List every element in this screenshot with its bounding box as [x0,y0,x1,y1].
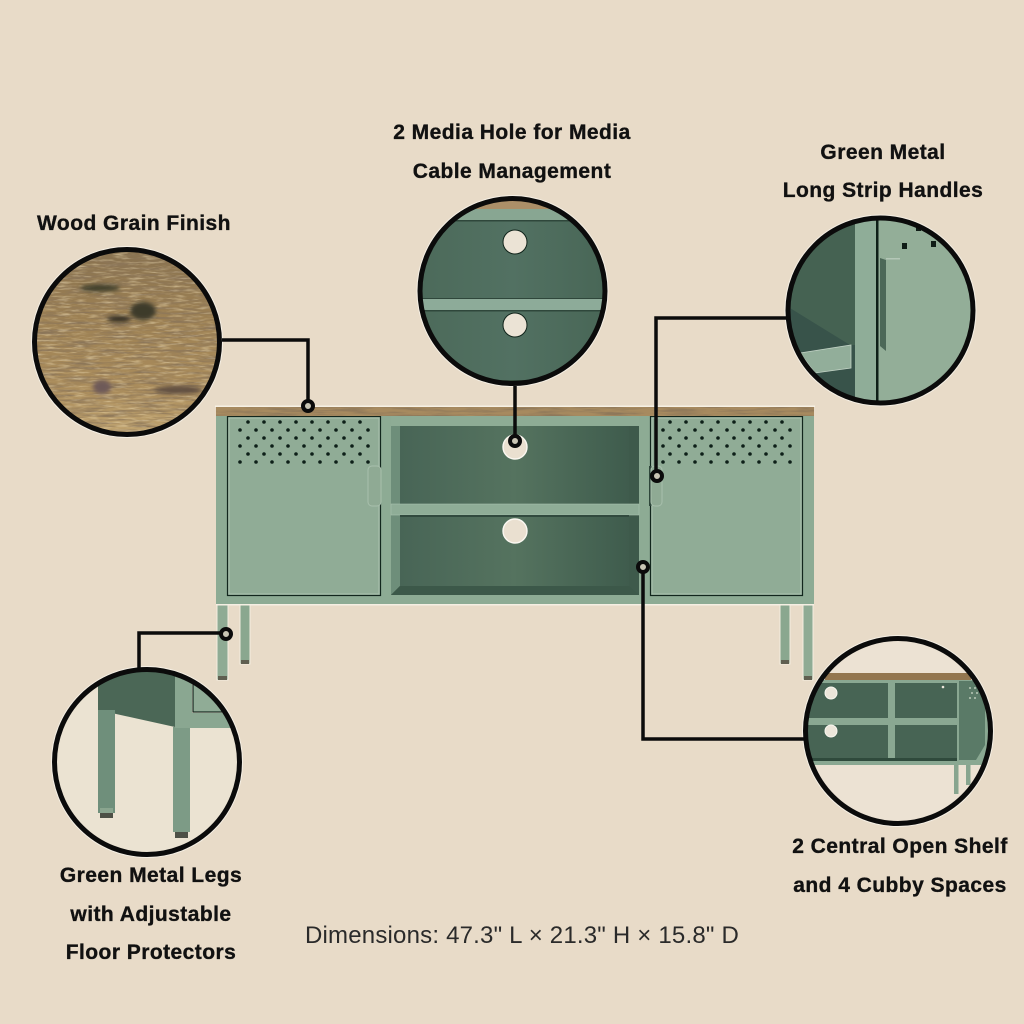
label: legs: Floor Protectors [66,941,236,964]
connector: wood grain [222,340,313,411]
wood top [215,406,815,416]
cabinet legs [217,604,813,680]
label: handles: Long Strip Handles [783,179,983,202]
panel: central open shelf [802,635,994,827]
connector: handles [652,318,787,481]
connector: open shelf [638,562,805,739]
label: wood grain finish: Wood Grain Finish [37,212,231,235]
TV cabinet [215,406,815,680]
label: open shelf: 2 Central Open Shelf [792,835,1008,858]
label: open shelf: and 4 Cubby Spaces [793,874,1007,897]
label: legs [60,864,242,964]
central open compartment [391,416,639,595]
label: handles [783,141,983,202]
panel: long strip handles [784,214,976,407]
panel: wood grain finish [30,245,224,439]
label: media hole: Cable Management [413,160,611,183]
dimensions: Dimensions: 47.3" L × 21.3" H × 15.8" D [305,922,739,949]
label: open shelf [792,835,1008,897]
label: legs: Green Metal Legs [60,864,242,887]
media holes [503,435,527,459]
panel: media holes [416,195,609,388]
label: media hole [393,121,631,183]
handle strip [880,258,886,351]
connector: media hole [510,386,520,446]
wood texture [37,252,217,432]
middle shelf [391,504,639,515]
label: handles: Green Metal [820,141,946,164]
left door [228,416,381,596]
panel: metal legs [50,665,245,859]
label: media hole: 2 Media Hole for Media [393,121,631,144]
right door [649,416,802,596]
connector: legs [139,629,231,668]
cabinet body frame [216,414,814,605]
hole details [503,230,527,254]
label: legs: with Adjustable [69,903,232,926]
